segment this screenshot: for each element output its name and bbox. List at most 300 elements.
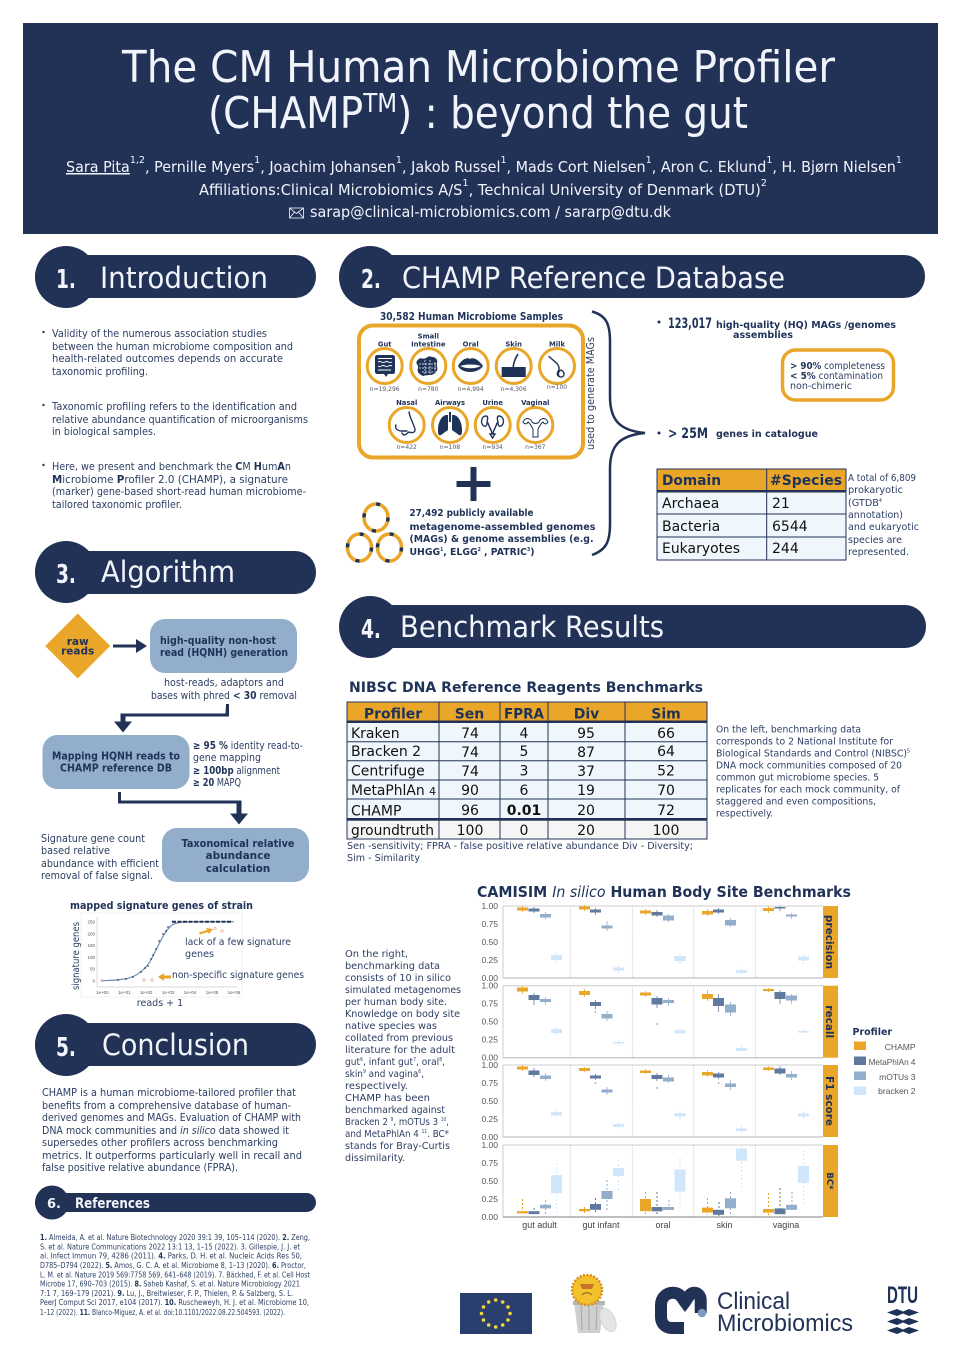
affiliations: 1 xyxy=(462,178,469,189)
panel: references list: al. Infect Immun 79, 4286 (2011). 4. Parks, D. H. et al. Nucleic Acids Res 50, xyxy=(40,1252,302,1260)
icon: oral: Oral xyxy=(463,340,479,348)
callout: quality criteria: non-chimeric xyxy=(790,381,852,392)
text: CAMISIM description: skin xyxy=(345,1069,365,1080)
text: CAMISIM description: simulated metagenomes xyxy=(345,985,461,996)
note: signature gene: removal of false signal. xyxy=(41,870,153,882)
panel: introduction text: taxonomic profiling. xyxy=(52,366,148,378)
chart: mapped signature genes: 1e+06 xyxy=(228,990,241,995)
x axis labels: gut adult xyxy=(522,1220,557,1230)
panel: references list: 1. Almeida, A. et al. Nature Biotechnology 2020 39:1 39, 105–114 (2020). 2. Zeng, xyxy=(40,1233,310,1242)
panel: BC xyxy=(517,1146,809,1216)
affiliations: Affiliations:Clinical Microbiomics A/S xyxy=(199,181,469,199)
icon: nasal xyxy=(389,399,424,451)
table: NIBSC benchmark: MetaPhlAn 4 xyxy=(351,783,436,799)
chart: CAMISIM boxplots xyxy=(481,901,838,1230)
section heading: References xyxy=(35,1186,316,1220)
table: NIBSC benchmark: 74 xyxy=(461,764,479,780)
step: raw reads: reads xyxy=(61,646,94,658)
table: NIBSC benchmark: FPRA xyxy=(504,706,544,722)
table: NIBSC benchmark: 72 xyxy=(657,803,675,819)
y axis ticks: 0.25 xyxy=(481,1114,498,1124)
text: CAMISIM description: On the right, xyxy=(345,949,408,960)
text: CAMISIM description: 7 xyxy=(413,1057,416,1063)
panel: conclusion text: CHAMP is a human microbiome-tailored profiler that xyxy=(42,1087,296,1099)
panel: introduction text: health-related outcomes depends on accurate xyxy=(52,353,283,365)
table: NIBSC benchmark: 100 xyxy=(457,823,483,839)
table: NIBSC benchmark: 52 xyxy=(657,764,675,780)
step: mapping: Mapping HQNH reads to xyxy=(52,750,180,762)
legend: profiler: bracken 2 xyxy=(878,1086,916,1096)
y axis ticks: 0.00 xyxy=(481,1053,498,1063)
facet labels: precision xyxy=(823,915,835,969)
note: signature gene: based relative xyxy=(41,845,110,857)
text: CAMISIM description: Bracken 2 xyxy=(345,1117,395,1128)
panel: introduction text: Taxonomic profiling refers to the identification and xyxy=(51,401,297,413)
y axis ticks: 0.25 xyxy=(481,1194,498,1204)
annotation: lack of a few: lack of a few signature xyxy=(185,937,291,948)
step: abundance calculation xyxy=(162,828,309,882)
y axis ticks: 1.00 xyxy=(481,1140,498,1150)
legend: profiler: Profiler xyxy=(852,1027,892,1038)
icon: skin: n=4,306 xyxy=(501,386,527,393)
table: NIBSC benchmark: Kraken xyxy=(351,726,400,742)
text: CAMISIM description: 9 xyxy=(363,1069,366,1075)
table: NIBSC benchmark: groundtruth xyxy=(351,823,434,839)
text: NIBSC description: corresponds to 2 National Institute for xyxy=(716,736,894,748)
y axis ticks: 0.25 xyxy=(481,1035,498,1045)
y axis ticks: 0.50 xyxy=(481,1017,498,1027)
icon: oral xyxy=(453,340,488,393)
panel: references list: S. et al. Nature Communications 2022 13:1 13, 1–15 (2022). 3. Gillespie, J. J. et xyxy=(40,1242,300,1252)
text: CAMISIM description: stands for Bray-Curtis xyxy=(345,1141,450,1152)
panel: references list: D785–D794 (2022). 5. Amos, G. C. A. et al. Microbiome 8, 1–13 (2020). 6. Proctor, xyxy=(40,1261,306,1270)
icon: oral: n=4,994 xyxy=(458,386,484,393)
stat: MAGs count xyxy=(658,316,896,341)
table: species per domain: #Species xyxy=(770,473,842,489)
icon: gut: n=19,296 xyxy=(370,386,400,393)
legend: profiler: mOTUs 3 xyxy=(879,1072,916,1082)
y axis ticks: 0.75 xyxy=(481,1158,498,1168)
icon: small intestine: Small xyxy=(418,332,439,340)
icon: milk: n=100 xyxy=(547,384,567,391)
icon: small intestine xyxy=(411,332,446,393)
section heading: Benchmark Results: Benchmark Results xyxy=(400,610,664,644)
step: mapping xyxy=(42,735,190,789)
y axis ticks: 0.00 xyxy=(481,1132,498,1142)
authors: 1 xyxy=(766,155,772,166)
text: public genomes xyxy=(410,508,596,558)
chart: mapped signature genes: 250 xyxy=(87,920,95,924)
text: species note: prokaryotic xyxy=(848,485,903,496)
chart: mapped signature genes: 1e+03 xyxy=(162,990,175,995)
panel: conclusion text xyxy=(42,1087,302,1174)
logo: Clinical Microbiomics: Microbiomics xyxy=(717,1310,853,1337)
chart: mapped signature genes: 100 xyxy=(87,955,95,960)
icon: plus xyxy=(456,467,490,501)
panel: introduction text: Here, we present and benchmark the CM HumAn xyxy=(52,461,291,473)
icon: envelope xyxy=(290,208,304,218)
facet strips xyxy=(823,906,838,1217)
stat: genes in catalogue: > 25M xyxy=(668,426,708,442)
authors: 1 xyxy=(500,155,507,166)
panel: introduction text: Microbiome Profiler 2.0 (CHAMP), a signature xyxy=(52,474,288,486)
x axis label: reads + 1 xyxy=(137,998,183,1009)
table: NIBSC benchmark: 70 xyxy=(657,783,675,799)
panel: introduction text: Validity of the numerous association studies xyxy=(52,328,267,340)
text: CAMISIM description: 10 xyxy=(441,1117,446,1123)
section heading: Algorithm xyxy=(35,541,316,603)
text: NIBSC description: respectively. xyxy=(716,808,773,820)
stat: MAGs count: 123,017 xyxy=(668,316,712,332)
text: species note: A total of 6,809 xyxy=(848,473,916,484)
step: mapping: CHAMP reference DB xyxy=(60,762,172,774)
y axis ticks: 0.00 xyxy=(481,973,498,983)
step: raw reads: raw xyxy=(67,636,89,648)
section heading: Benchmark Results: 4. xyxy=(361,615,381,645)
panel: conclusion text: benefits from a comprehensive database of human- xyxy=(42,1100,291,1112)
chart: mapped signature genes: 1e+01 xyxy=(118,990,131,995)
text: CAMISIM description: 11 xyxy=(422,1129,427,1135)
section heading: References: 6. xyxy=(47,1197,61,1212)
stat: genes in catalogue: genes in catalogue xyxy=(716,429,818,440)
text: species note: annotation) xyxy=(848,510,903,521)
panel: conclusion text: false positive relative abundance (FPRA). xyxy=(42,1162,238,1174)
logo: Clinical Microbiomics xyxy=(661,1288,853,1337)
annotation: non-specific: non-specific signature genes xyxy=(172,970,304,981)
chart: mapped signature genes xyxy=(70,900,304,1009)
contact email: sarap@clinical-microbiomics.com / sararp@dtu.dk xyxy=(310,203,671,221)
table: NIBSC benchmark: 3 xyxy=(520,764,528,780)
text: CAMISIM description: 6 xyxy=(418,1069,421,1075)
section heading: Benchmark Results xyxy=(339,596,926,658)
note: mapping thresholds: gene mapping xyxy=(193,752,261,764)
text: CAMISIM description: per human body site. xyxy=(345,997,447,1008)
step: HQNH generation: high-quality non-host xyxy=(160,635,276,647)
whiskers: precision, recall, F1 xyxy=(522,905,804,1133)
text: CAMISIM description xyxy=(345,949,461,1164)
text: CAMISIM description: dissimilarity. xyxy=(345,1153,405,1164)
legend: profiler: CHAMP xyxy=(885,1042,916,1052)
panel: references list xyxy=(40,1233,310,1317)
note: mapping thresholds xyxy=(193,740,303,789)
text: public genomes: , ELGG xyxy=(443,547,478,558)
authors: , Mads Cort Nielsen xyxy=(507,158,646,176)
y axis label: signature genes xyxy=(71,922,82,990)
step: abundance calculation: abundance xyxy=(206,850,270,862)
step: HQNH generation: read (HQNH) generation xyxy=(160,647,288,659)
text: CAMISIM description: and vagina xyxy=(366,1069,418,1080)
chart: mapped signature genes: 1e+04 xyxy=(184,990,197,995)
icon: skin xyxy=(496,340,531,393)
note: signature gene: Signature gene count xyxy=(41,833,145,845)
logo: DTU xyxy=(887,1282,919,1334)
text: CAMISIM description: , xyxy=(442,1057,445,1068)
logo mark xyxy=(661,1293,706,1328)
table: species per domain: 21 xyxy=(772,496,790,512)
table: NIBSC benchmark: 66 xyxy=(657,726,675,742)
table: NIBSC benchmark: Bracken 2 xyxy=(351,744,421,760)
step: HQNH generation xyxy=(150,619,297,673)
y axis ticks: 0.50 xyxy=(481,937,498,947)
note: signature gene: abundance with efficient xyxy=(41,858,159,870)
y axis ticks: 0.75 xyxy=(481,919,498,929)
authors: , Pernille Myers xyxy=(145,158,254,176)
text: public genomes: ) xyxy=(530,547,534,558)
section heading: Conclusion: Conclusion xyxy=(102,1028,249,1062)
icon: gut xyxy=(367,340,402,393)
note: mapping thresholds: ≥ 20 MAPQ xyxy=(193,777,241,789)
authors: Sara Pita xyxy=(66,158,130,176)
text: species note: and eukaryotic xyxy=(848,522,919,533)
text: public genomes: 27,492 publicly available xyxy=(410,508,534,519)
affiliations: , Technical University of Denmark (DTU) xyxy=(469,181,761,199)
icon: genome rings xyxy=(348,504,402,561)
section heading: Introduction xyxy=(35,246,316,308)
legend: profiler xyxy=(852,1027,916,1096)
note: mapping thresholds: ≥ 95 % identity read-to- xyxy=(193,740,303,752)
x axis labels: vagina xyxy=(773,1220,799,1230)
text: CAMISIM description: literature for the adult xyxy=(345,1045,455,1056)
table: NIBSC benchmark: 19 xyxy=(577,783,595,799)
facet labels xyxy=(823,915,835,1190)
callout: quality criteria: < 5% contamination xyxy=(790,371,883,382)
y axis ticks: 0.50 xyxy=(481,1176,498,1186)
panel: conclusion text: metrics. It outperforms particularly well in recall and xyxy=(42,1150,302,1162)
text: CAMISIM description: collated from previous xyxy=(345,1033,453,1044)
note: removal xyxy=(151,677,297,702)
text: CAMISIM description: 9 xyxy=(391,1117,393,1123)
section heading: CHAMP Reference Database: 2. xyxy=(361,265,381,295)
brace xyxy=(592,312,645,555)
table: NIBSC benchmark: Sen xyxy=(455,706,484,722)
annotation: lack of a few: genes xyxy=(185,949,214,960)
logo: EU flag xyxy=(460,1293,532,1334)
panel: conclusion text: supersedes other profilers across benchmarking xyxy=(42,1137,278,1149)
note: removal: host-reads, adaptors and xyxy=(164,677,284,689)
text: NIBSC description: Biological Standards and Control (NIBSC) xyxy=(716,748,921,760)
y axis ticks xyxy=(481,901,498,1222)
text: CAMISIM description: respectively. xyxy=(345,1081,408,1092)
authors: 1,2 xyxy=(130,155,145,166)
callout: quality criteria: > 90% completeness xyxy=(790,361,885,372)
text: public genomes: 2 xyxy=(478,547,481,553)
authors: , Aron C. Eklund xyxy=(652,158,766,176)
stat: genes in catalogue xyxy=(658,426,818,442)
text: species note: species are xyxy=(848,535,902,546)
panel: conclusion text: DNA mock communities and in silico data showed it xyxy=(42,1125,289,1137)
header banner xyxy=(23,23,938,234)
note: mapping thresholds: ≥ 100bp alignment xyxy=(193,765,280,777)
title: ) : beyond the gut xyxy=(397,88,748,139)
authors: 1 xyxy=(396,155,402,166)
text: NIBSC description: replicates for each mock community, of xyxy=(716,784,900,796)
icon: milk: Milk xyxy=(549,340,565,348)
panel: recall xyxy=(517,988,809,1051)
heading: NIBSC benchmarks: NIBSC DNA Reference Reagents Benchmarks xyxy=(349,680,703,696)
table: species per domain: Bacteria xyxy=(662,519,720,535)
icon: small intestine: n=780 xyxy=(418,386,439,393)
table: NIBSC benchmark xyxy=(347,702,707,839)
table: NIBSC benchmark: 90 xyxy=(461,783,479,799)
text: CAMISIM description: benchmarked against xyxy=(345,1105,445,1116)
stat: MAGs count: assemblies xyxy=(733,330,793,341)
vertical label: used to generate MAGs: used to generate MAGs xyxy=(585,337,597,450)
section heading: Conclusion: 5. xyxy=(56,1033,76,1063)
logo: DTU: DTU xyxy=(887,1282,918,1309)
text: CAMISIM description: benchmarking data xyxy=(345,961,440,972)
chart: mapped signature genes: 200 xyxy=(87,932,95,936)
text: CAMISIM description: CHAMP has been xyxy=(345,1093,430,1104)
text: public genomes: (MAGs) & genome assemblies (e.g. xyxy=(410,534,594,545)
table footnote: Sen -sensitivity; FPRA - false positive relative abundance Div - Diversity; xyxy=(347,841,693,852)
body-site frame xyxy=(359,326,583,458)
text: species note: (GTDB xyxy=(848,498,880,509)
section heading: References: References xyxy=(75,1196,150,1212)
authors: , H. Bjørn Nielsen xyxy=(772,158,896,176)
y axis ticks: 0.75 xyxy=(481,999,498,1009)
icon: vaginal: Vaginal xyxy=(521,399,550,407)
y axis ticks: 1.00 xyxy=(481,981,498,991)
x axis labels: oral xyxy=(655,1220,671,1230)
text: public genomes: 1 xyxy=(440,547,444,553)
text: CAMISIM description: 8 xyxy=(439,1057,442,1063)
affiliations: 2 xyxy=(761,178,767,189)
text: public genomes: metagenome-assembled genomes xyxy=(410,522,596,533)
chart: mapped signature genes: 150 xyxy=(87,943,95,948)
panel: introduction text: relative abundance quantification of microorganisms xyxy=(52,414,308,426)
y axis ticks: 0.00 xyxy=(481,1212,498,1222)
note: signature gene xyxy=(41,833,159,882)
icon: nasal: n=422 xyxy=(397,444,417,451)
table: NIBSC benchmark: 74 xyxy=(461,726,479,742)
annotation: lack of a few xyxy=(185,928,291,960)
outliers xyxy=(595,1010,719,1089)
arrow: to HQNH xyxy=(113,639,147,653)
table: NIBSC benchmark: Profiler xyxy=(364,706,422,722)
authors: 1 xyxy=(646,155,652,166)
panel: F1 score xyxy=(517,1066,809,1131)
step: abundance calculation: calculation xyxy=(206,863,270,875)
section heading: CHAMP Reference Database: CHAMP Reference Database xyxy=(402,261,785,295)
chart: mapped signature genes: 50 xyxy=(90,966,95,972)
panel: introduction text: tailored taxonomic profiler. xyxy=(52,499,182,511)
table: NIBSC benchmark: 20 xyxy=(577,823,595,839)
table: NIBSC benchmark: 100 xyxy=(653,823,679,839)
panel: introduction text: in biological samples. xyxy=(52,426,156,438)
text: species note: represented. xyxy=(848,547,909,558)
y axis ticks: 0.50 xyxy=(481,1096,498,1106)
table: NIBSC benchmark: 74 xyxy=(461,745,479,761)
title: TM xyxy=(362,89,397,119)
table: NIBSC benchmark: 87 xyxy=(577,745,595,761)
y axis ticks: 0.75 xyxy=(481,1078,498,1088)
icon: vaginal xyxy=(518,399,553,451)
panel grid xyxy=(503,906,823,1217)
text: CAMISIM description: , xyxy=(421,1069,424,1080)
text: CAMISIM description: . BC* xyxy=(427,1129,449,1140)
authors: 1 xyxy=(896,155,902,166)
logo: bacterium in trash bin xyxy=(572,1275,620,1334)
panel: human microbiome samples xyxy=(359,311,583,458)
table: NIBSC benchmark: 95 xyxy=(577,726,595,742)
stat: MAGs count: high-quality (HQ) MAGs /genomes xyxy=(716,320,896,331)
icon: urine xyxy=(475,399,510,451)
panel: references list: L. M. et al. Nature 2019 569:7758 569, 641–648 (2019). 7. Bäckhed, F. et al. Cell Host xyxy=(40,1270,310,1280)
text: CAMISIM description: gut xyxy=(345,1057,362,1068)
icon: urine: Urine xyxy=(482,399,503,407)
table: NIBSC benchmark: 96 xyxy=(461,803,479,819)
y axis ticks: 1.00 xyxy=(481,1060,498,1070)
chart: mapped signature genes: 1e+02 xyxy=(140,990,153,995)
text: CAMISIM description: , infant gut xyxy=(363,1057,413,1068)
table: NIBSC benchmark: 20 xyxy=(577,803,595,819)
section heading: Introduction: Introduction xyxy=(100,261,268,295)
text: CAMISIM description: , xyxy=(446,1117,449,1128)
facet labels: F1 score xyxy=(823,1076,835,1126)
title: (CHAMP xyxy=(208,88,384,139)
table: NIBSC benchmark: CHAMP xyxy=(351,804,401,820)
icon: small intestine: Intestine xyxy=(411,340,446,348)
heading: samples: 30,582 Human Microbiome Samples xyxy=(380,311,563,323)
text: NIBSC description xyxy=(716,724,910,820)
text: NIBSC description: common gut microbiome species. 5 xyxy=(716,772,879,784)
icon: urine: n=934 xyxy=(483,444,503,451)
section heading: Conclusion xyxy=(35,1014,316,1076)
legend: profiler: MetaPhlAn 4 xyxy=(869,1058,916,1067)
panel: references list: 7:1 7, 169–179 (2021). 9. Lu, J., Breitwieser, F. P., Thielen, P. & Salzberg, S. L. xyxy=(40,1289,293,1298)
step: raw reads xyxy=(45,614,110,678)
table: NIBSC benchmark: Centrifuge xyxy=(351,764,425,780)
heading: CAMISIM benchmarks: CAMISIM In silico Human Body Site Benchmarks xyxy=(477,883,851,901)
text: CAMISIM description: 6 xyxy=(360,1057,363,1063)
table: species per domain: Eukaryotes xyxy=(662,541,740,557)
logo: Clinical Microbiomics: Clinical xyxy=(717,1288,790,1315)
x axis labels: gut infant xyxy=(582,1220,620,1230)
x axis labels xyxy=(522,1220,799,1230)
icon: airways xyxy=(432,399,468,451)
chart: mapped signature genes: 1e+05 xyxy=(206,990,219,995)
panel: introduction text: between the human microbiome composition and xyxy=(52,341,293,353)
text: species note xyxy=(848,473,919,558)
text: NIBSC description: On the left, benchmarking data xyxy=(716,724,861,736)
callout: quality criteria xyxy=(782,350,894,400)
arrow: to abundance xyxy=(118,792,248,824)
text: NIBSC description: 5 xyxy=(907,748,910,754)
text: CAMISIM description: and MetaPhlAn 4 xyxy=(345,1129,430,1140)
panel: introduction text xyxy=(42,328,308,511)
text: public genomes: 3 xyxy=(527,547,531,553)
table: species per domain xyxy=(657,469,846,560)
table: NIBSC benchmark: 0.01 xyxy=(507,803,541,819)
title xyxy=(121,42,836,139)
table footnote xyxy=(347,841,693,864)
chart title: mapped signature genes of strain xyxy=(70,900,253,912)
x axis labels: skin xyxy=(716,1220,733,1230)
table footnote: Sim - Similarity xyxy=(347,853,420,864)
icon: vaginal: n=367 xyxy=(525,444,546,451)
text: CAMISIM description: , oral xyxy=(416,1057,439,1068)
section heading: Algorithm: Algorithm xyxy=(101,555,235,589)
table: NIBSC benchmark: Sim xyxy=(651,706,681,722)
text: species note: 4 xyxy=(879,498,882,504)
table: NIBSC benchmark: 4 xyxy=(520,726,529,742)
text: CAMISIM description: consists of 10 in silico xyxy=(345,973,451,984)
icon: nasal: Nasal xyxy=(396,399,417,407)
section heading: Introduction: 1. xyxy=(56,265,76,295)
table: NIBSC benchmark: 6 xyxy=(520,783,529,799)
table: NIBSC benchmark: Div xyxy=(574,706,599,722)
text: public genomes: UHGG xyxy=(410,547,442,558)
